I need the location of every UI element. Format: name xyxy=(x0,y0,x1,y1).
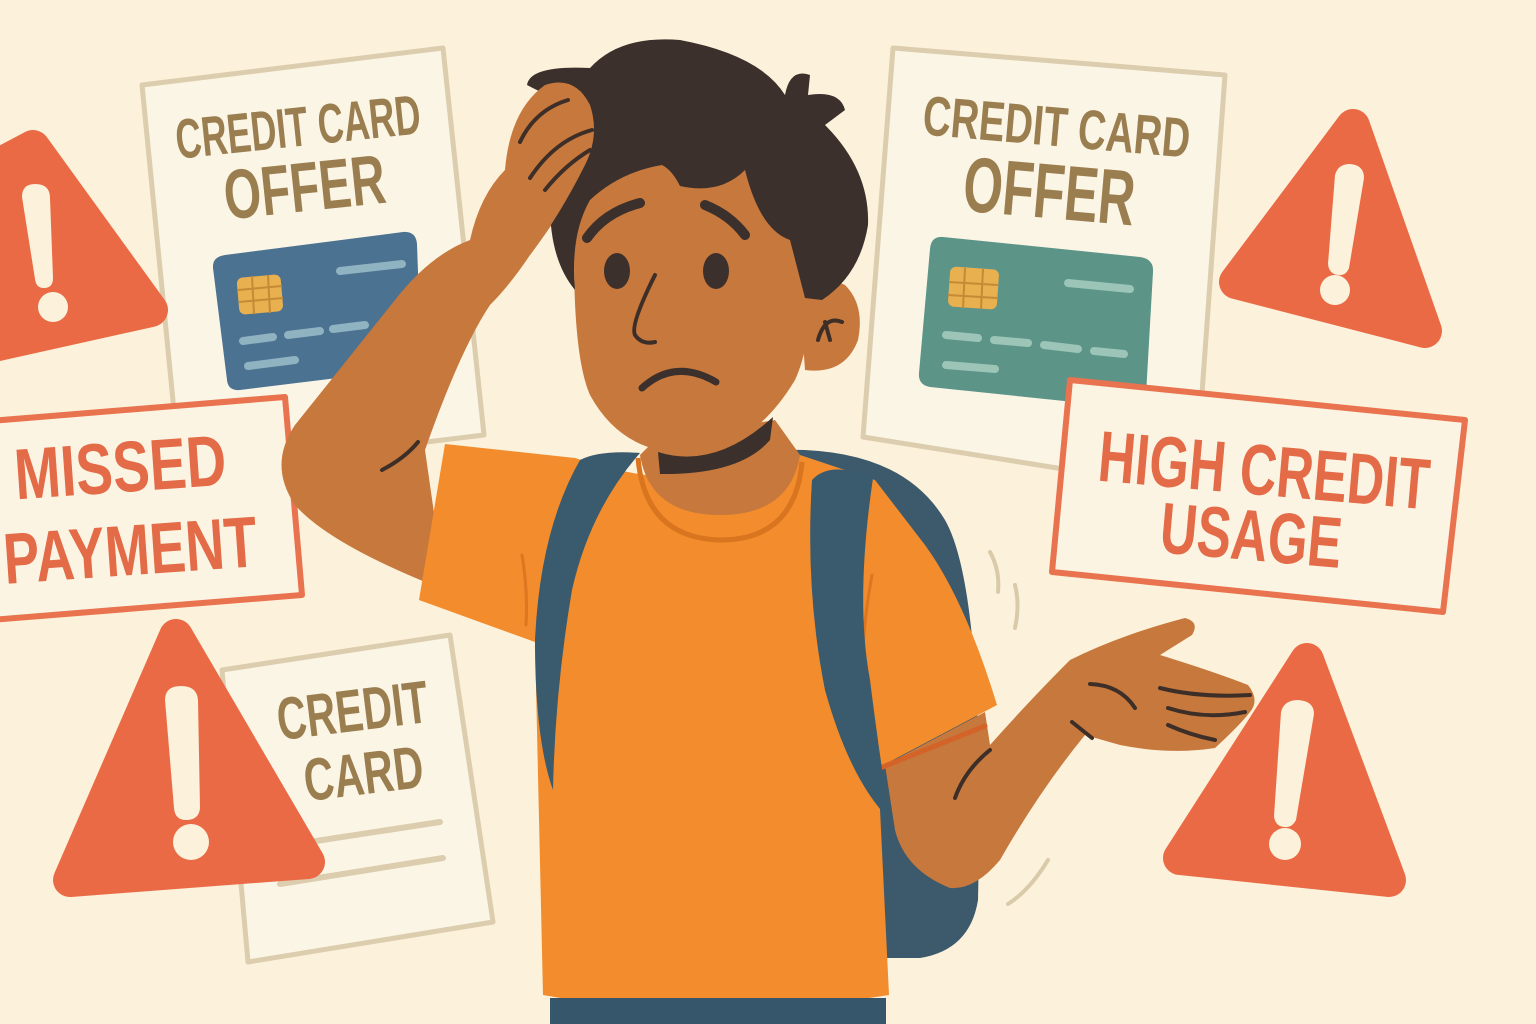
ear line xyxy=(818,320,842,340)
icon: warning triangle, top left xyxy=(0,147,151,348)
raised arm xyxy=(282,165,590,590)
sign: high credit usage: USAGE xyxy=(1157,488,1345,584)
sign: missed payment xyxy=(0,397,302,620)
hand lines xyxy=(955,684,1250,798)
inner collar shadow xyxy=(658,417,773,474)
eyebrows xyxy=(587,203,745,238)
sign: missed payment: PAYMENT xyxy=(1,502,260,600)
backpack straps xyxy=(535,452,890,820)
icon: blue credit card xyxy=(213,232,421,390)
document: credit card, bottom left: CREDIT xyxy=(273,668,432,753)
document: credit card offer, top left xyxy=(142,48,484,472)
frowning mouth xyxy=(642,371,716,388)
person: worried student xyxy=(282,39,1255,1024)
neck xyxy=(640,420,800,515)
icon: warning triangle, bottom left xyxy=(70,636,308,880)
document: credit card, bottom left xyxy=(222,635,493,962)
nose xyxy=(634,275,655,343)
elbow crease line xyxy=(382,442,418,470)
sign: high credit usage xyxy=(1052,380,1465,612)
trousers xyxy=(550,998,886,1024)
hair xyxy=(527,39,868,300)
orange shirt xyxy=(419,444,997,1010)
shirt folds xyxy=(522,555,872,700)
hand over hair xyxy=(478,82,594,290)
icon: teal credit card xyxy=(919,237,1153,408)
ear xyxy=(800,282,860,371)
eyes xyxy=(604,253,729,289)
document: credit card offer, top left: CREDIT CARD xyxy=(172,82,424,171)
finger lines xyxy=(520,100,592,190)
motion lines xyxy=(990,552,1048,904)
head xyxy=(574,150,812,453)
shirt collar xyxy=(638,458,802,540)
document: credit card offer, top right: CREDIT CARD xyxy=(920,84,1193,170)
shirt sleeve hem xyxy=(880,726,985,768)
document: credit card, bottom left: CARD xyxy=(300,733,427,814)
icon: warning triangle, top right xyxy=(1236,126,1425,331)
lowered arm and open hand xyxy=(885,618,1255,888)
sign: missed payment: MISSED xyxy=(12,421,229,515)
icon: warning triangle, bottom right xyxy=(1180,660,1389,880)
document: credit card offer, top right xyxy=(863,48,1225,490)
document: credit card offer, top right: OFFER xyxy=(960,140,1139,242)
document: credit card offer, top left: OFFER xyxy=(220,140,389,234)
backpack xyxy=(536,450,979,958)
